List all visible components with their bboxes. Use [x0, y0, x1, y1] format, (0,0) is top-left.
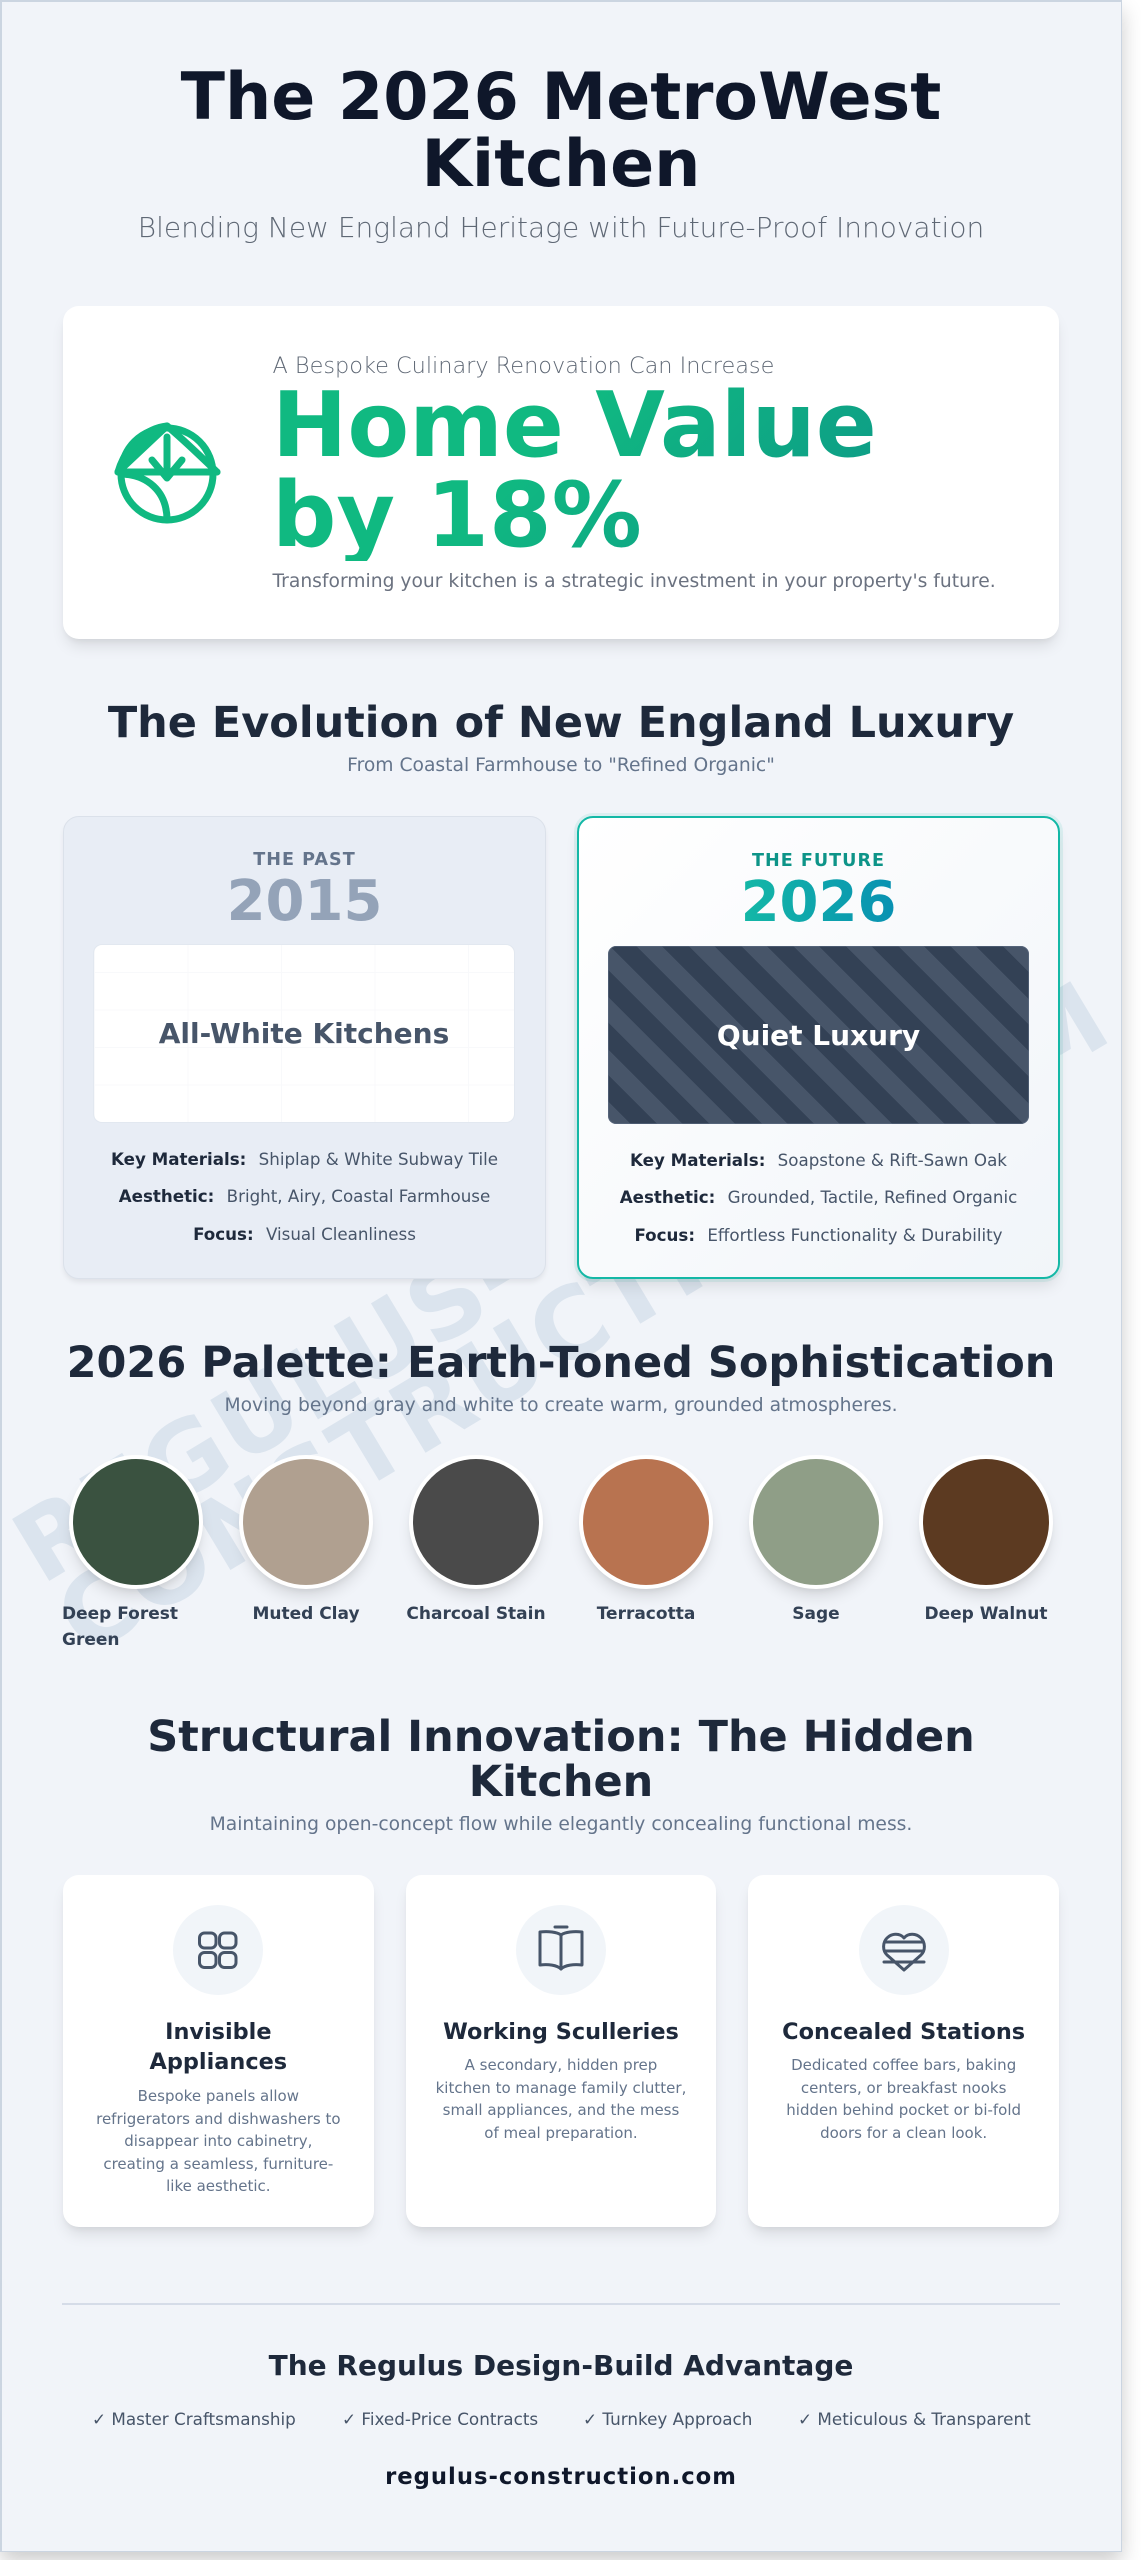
past year: 2015 — [227, 869, 382, 934]
future label: THE FUTURE — [752, 851, 885, 871]
card title: Invisible — [165, 2019, 272, 2045]
watermark: CONSTRUCTION.COM — [38, 959, 1122, 1678]
icon: grid — [173, 1905, 263, 1995]
card text: doors for a clean look. — [820, 2124, 987, 2142]
heading: structural innovation: Kitchen — [469, 1757, 653, 1807]
heading: evolution: The Evolution of New England Luxury — [108, 698, 1014, 748]
icon: heart layers — [859, 1905, 949, 1995]
subheading: structural innovation: Maintaining open-concept flow while elegantly concealing functional mess. — [210, 1814, 912, 1834]
past image: all-white kitchens: All-White Kitchens — [159, 1017, 449, 1050]
card text — [96, 2087, 341, 2195]
hero note: Transforming your kitchen is a strategic investment in your property's future. — [272, 570, 996, 592]
swatch: sage — [749, 1455, 883, 1589]
card text: Bespoke panels allow — [138, 2087, 299, 2105]
footer website: regulus-construction.com — [385, 2464, 737, 2490]
card title — [150, 2019, 287, 2075]
label: deep forest green: Deep Forest Green — [62, 1604, 178, 1650]
card text: of meal preparation. — [484, 2124, 638, 2142]
subheading: evolution: From Coastal Farmhouse to "Refined Organic" — [347, 754, 775, 776]
past details — [111, 1149, 498, 1244]
past details: Key Materials: Shiplap & White Subway Tile — [111, 1149, 498, 1169]
past image: all-white kitchens — [94, 945, 514, 1122]
icon: book — [516, 1905, 606, 1995]
panel: home value hero — [63, 306, 1059, 639]
benefit: fixed-price contracts: ✓ Fixed-Price Contracts — [342, 2408, 538, 2428]
future year: 2026 — [741, 870, 896, 935]
card text: hidden behind pocket or bi-fold — [786, 2101, 1021, 2119]
panel: the past — [63, 816, 546, 1279]
swatch: charcoal stain — [409, 1455, 543, 1589]
future details: Key Materials: Soapstone & Rift-Sawn Oak — [630, 1150, 1007, 1170]
past details: Aesthetic: Bright, Airy, Coastal Farmhouse — [119, 1186, 490, 1206]
past details: Focus: Visual Cleanliness — [193, 1224, 416, 1244]
card title: Working Sculleries — [443, 2019, 679, 2045]
label: sage: Sage — [792, 1604, 840, 1624]
panel: the future — [577, 816, 1060, 1279]
label: charcoal stain: Charcoal Stain — [406, 1604, 546, 1624]
future details: Focus: Effortless Functionality & Durability — [634, 1225, 1003, 1245]
card text: kitchen to manage family clutter, — [436, 2078, 686, 2096]
title — [180, 60, 941, 202]
watermark: REGULUS- — [0, 1212, 546, 1606]
card text: small appliances, and the mess — [443, 2101, 679, 2119]
heading: structural innovation — [147, 1712, 975, 1807]
future year — [579, 873, 1058, 933]
label: deep walnut: Deep Walnut — [924, 1604, 1048, 1624]
swatch: muted clay — [239, 1455, 373, 1589]
benefit: master craftsmanship: ✓ Master Craftsmanship — [92, 2408, 296, 2428]
hero value: Home Value — [272, 373, 877, 478]
future image: quiet luxury — [608, 946, 1029, 1124]
label: terracotta: Terracotta — [597, 1604, 695, 1624]
card text: A secondary, hidden prep — [465, 2056, 657, 2074]
card text: refrigerators and dishwashers to — [96, 2110, 341, 2128]
footer heading: The Regulus Design-Build Advantage — [269, 2348, 853, 2382]
future details — [620, 1150, 1017, 1245]
card title: Concealed Stations — [782, 2019, 1025, 2045]
card title: Appliances — [150, 2049, 287, 2075]
card text: like aesthetic. — [166, 2177, 271, 2195]
card text — [436, 2056, 686, 2142]
card text: disappear into cabinetry, — [124, 2132, 312, 2150]
subtitle: Blending New England Heritage with Future-Proof Innovation — [138, 211, 984, 244]
icon: home value growth — [114, 422, 220, 524]
past label: THE PAST — [253, 850, 356, 870]
swatch: deep walnut — [919, 1455, 1053, 1589]
swatch: terracotta — [579, 1455, 713, 1589]
hero value — [272, 381, 912, 561]
card text: creating a seamless, furniture- — [103, 2154, 333, 2172]
card text: Dedicated coffee bars, baking — [791, 2056, 1016, 2074]
panel: invisible appliances — [63, 1875, 374, 2227]
future details: Aesthetic: Grounded, Tactile, Refined Organic — [620, 1187, 1017, 1207]
benefit: meticulous and transparent: ✓ Meticulous & Transparent — [798, 2408, 1031, 2428]
title: The 2026 MetroWest — [181, 60, 941, 135]
panel: working sculleries — [406, 1875, 716, 2227]
panel: concealed stations — [748, 1875, 1059, 2227]
label: muted clay: Muted Clay — [252, 1604, 360, 1624]
title: Kitchen — [422, 127, 700, 202]
hero value: by 18% — [272, 463, 642, 568]
swatch: deep forest green — [69, 1455, 203, 1589]
subheading: palette: Moving beyond gray and white to create warm, grounded atmospheres. — [224, 1394, 898, 1416]
heading: structural innovation: Structural Innovation: The Hidden — [147, 1712, 975, 1762]
card text — [786, 2056, 1021, 2142]
card text: centers, or breakfast nooks — [801, 2078, 1006, 2096]
future image: quiet luxury: Quiet Luxury — [717, 1018, 920, 1052]
benefit: turnkey approach: ✓ Turnkey Approach — [583, 2408, 752, 2428]
hero kicker: A Bespoke Culinary Renovation Can Increase — [272, 353, 774, 379]
heading: palette: 2026 Palette: Earth-Toned Sophistication — [67, 1338, 1055, 1388]
